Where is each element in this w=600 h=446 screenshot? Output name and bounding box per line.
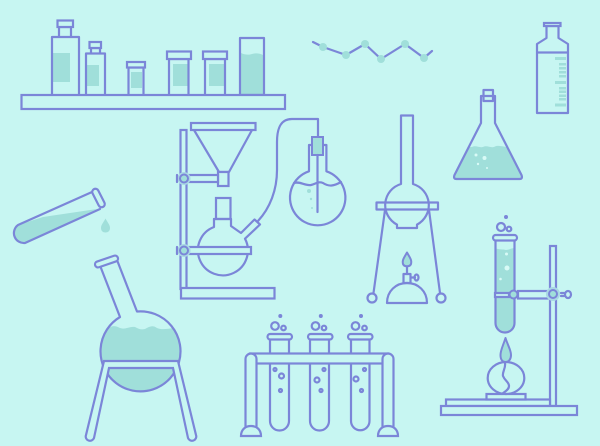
rack left leg [241,354,261,436]
erlenmeyer flask [454,90,522,179]
stand base [181,288,274,298]
round-bottom flask with side arm [186,198,260,275]
test tube rack [241,314,398,436]
falling drop [101,218,110,232]
rack bar [250,354,388,364]
tube 1 [268,314,292,430]
small burner [387,252,427,303]
measurement ticks [555,57,566,106]
shelf with bottles [22,20,285,109]
molecule chain [313,40,432,63]
funnel [186,123,256,186]
bottle 1 [52,20,79,95]
flask [385,116,429,228]
flask liquid [101,326,181,391]
pole and base [550,246,556,406]
tube 2 [308,314,332,430]
flask lip [94,255,119,268]
shelf board [22,95,285,109]
tilted test tube [14,188,106,243]
bottle 3 [127,62,145,95]
flask outline [100,260,181,391]
connecting hose [258,119,318,221]
graduated bottle [537,23,568,113]
receiving flask [290,137,345,225]
large flask on stand [86,255,196,441]
long-neck flask on tripod [368,116,446,303]
tripod feet [368,294,376,302]
flask stand [86,361,196,441]
tube 3 [348,314,372,430]
heating test tube stand [441,215,577,415]
filtration stand [177,119,345,298]
lower clamp [177,244,190,257]
beaker with liquid [240,38,264,95]
tripod band [376,202,438,210]
stand pole [180,130,186,289]
burner [486,338,526,400]
rack right leg [378,354,398,436]
jar 5 [203,52,227,95]
clamp arm [495,287,571,301]
test tube with liquid [493,235,517,333]
bubbles [497,215,511,231]
jar 4 [167,52,191,95]
bottle 2 [86,42,105,95]
upper clamp [177,172,190,185]
tripod legs [374,210,440,293]
